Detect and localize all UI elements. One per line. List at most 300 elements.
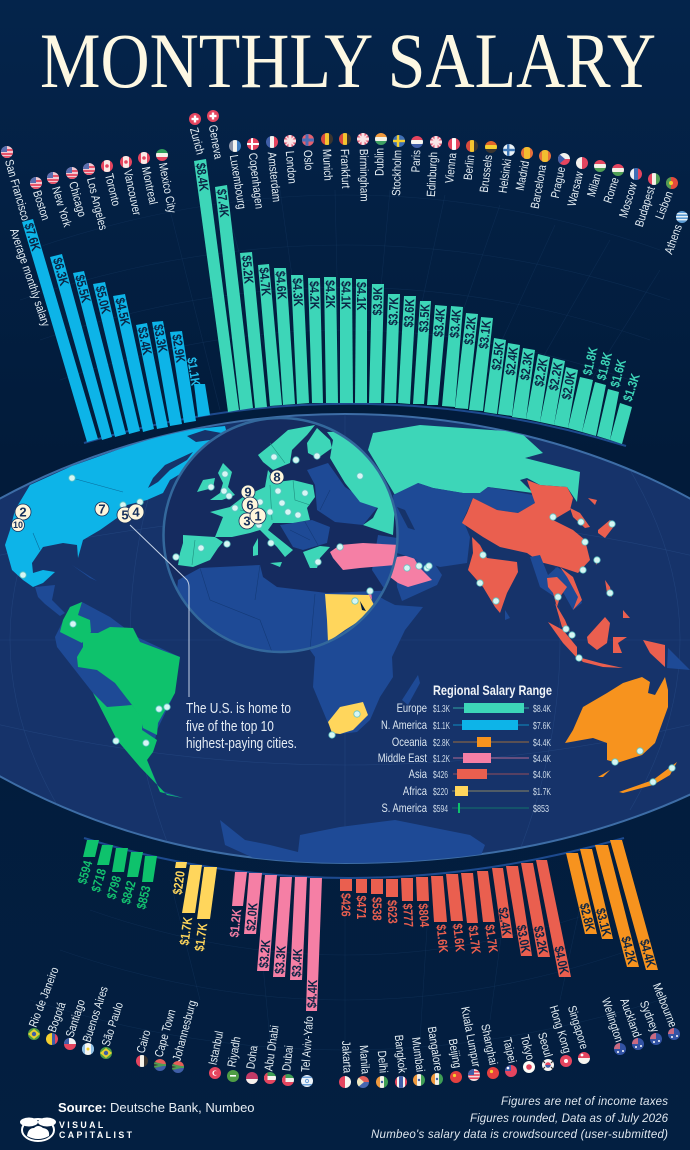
Eastern Europe (307, 463, 377, 525)
rank badges: 5 (121, 508, 129, 522)
New Zealand (619, 762, 677, 793)
legend title: Regional Salary Range (433, 682, 552, 698)
Vancouver (120, 156, 182, 426)
legend row: Middle East: $4.4K (533, 754, 551, 765)
logo: Visual Capitalist: CAPITALIST (59, 1130, 133, 1140)
San Francisco: San Francisco (2, 158, 32, 222)
Cape Town: $1.7K (176, 916, 196, 946)
rank badges: 10 (13, 520, 23, 530)
Bangkok: $623 (384, 900, 400, 924)
Hong Kong: Hong Kong (546, 1004, 573, 1055)
Geneva (206, 110, 253, 410)
Barcelona: $2.4K (502, 346, 521, 376)
Santiago (64, 848, 128, 1050)
Rio de Janeiro (27, 840, 99, 1040)
Cape Town (153, 865, 202, 1071)
Doha (245, 875, 277, 1084)
Arabia (395, 555, 442, 601)
San Francisco: $7.6K (21, 221, 44, 253)
Madrid: $2.5K (488, 341, 507, 371)
New York: New York (49, 185, 74, 229)
Bogotá: Bogotá (46, 1000, 69, 1034)
San Francisco (1, 146, 98, 442)
Manila: $471 (354, 896, 369, 920)
Chicago (66, 167, 140, 434)
Boston: $6.3K (50, 256, 72, 288)
Riyadh (226, 873, 262, 1082)
Mexico City: $1.1K (184, 356, 204, 387)
Dublin: Dublin (373, 148, 387, 176)
Brussels: $3.2K (461, 315, 479, 346)
Moscow: $1.8K (580, 345, 601, 377)
Taipei: Taipei (500, 1036, 518, 1064)
Rio de Janeiro: Rio de Janeiro (27, 965, 62, 1029)
base arc: top bars (84, 404, 626, 446)
Chicago: Chicago (66, 180, 88, 219)
legend row: Europe: $1.3K (433, 704, 450, 715)
Buenos Aires: Buenos Aires (81, 984, 111, 1044)
Prague (512, 153, 570, 419)
Johannesburg: $1.7K (191, 922, 211, 952)
Johannesburg (171, 867, 217, 1073)
Istanbul: Istanbul (207, 1030, 227, 1066)
legend row: Africa: $220 (433, 787, 448, 798)
Edinburgh (413, 136, 442, 404)
Jakarta (338, 879, 354, 1088)
legend row: S. America: $594 (433, 804, 448, 815)
Vienna (427, 138, 460, 405)
Santiago: $798 (103, 874, 124, 901)
Luxembourg (227, 140, 267, 408)
Edinburgh: $3.5K (416, 303, 433, 333)
bars: Africa (135, 862, 217, 1073)
Riyadh: Riyadh (226, 1036, 244, 1068)
Madrid: Madrid (514, 160, 532, 192)
Amsterdam: $4.6K (273, 270, 290, 300)
bars: Middle East (207, 872, 322, 1087)
Sydney (595, 845, 662, 1045)
Seoul (506, 866, 554, 1071)
Madrid (484, 147, 533, 414)
Iberia (178, 535, 223, 567)
South America (55, 602, 183, 798)
Budapest: $1.8K (594, 350, 615, 382)
Manila: Manila (356, 1045, 372, 1075)
Santiago: Santiago (64, 998, 88, 1039)
rank badges (12, 470, 284, 532)
Vienna: $3.4K (431, 307, 448, 337)
legend row: N. America: N. America (381, 719, 427, 732)
Frankfurt: $4.1K (338, 281, 354, 310)
logo: Visual Capitalist (20, 1118, 133, 1141)
Montreal (138, 152, 196, 423)
Barcelona (498, 150, 551, 416)
Munich: $4.2K (322, 280, 338, 309)
Brussels: Brussels (478, 154, 496, 193)
Brussels (455, 141, 497, 409)
Mexico City (156, 149, 210, 417)
Kuala Lumpur (446, 874, 482, 1081)
Cape Town: Cape Town (153, 1008, 179, 1059)
Montreal: $2.9K (169, 333, 188, 364)
Mumbai (400, 878, 426, 1086)
Melbourne (610, 840, 680, 1040)
legend row: Middle East: Middle East (378, 752, 427, 765)
Birmingham (354, 133, 370, 403)
Buenos Aires (81, 852, 143, 1055)
Boston (30, 177, 112, 440)
base arc: bottom bars (84, 838, 624, 878)
legend row: Middle East (378, 752, 551, 765)
Rome (554, 164, 624, 428)
Berlin: Berlin (462, 154, 478, 181)
Sydney: $4.2K (618, 935, 640, 966)
Dubai (280, 877, 307, 1086)
Melbourne: Melbourne (650, 981, 679, 1029)
Berlin (442, 140, 478, 407)
Beijing (431, 876, 463, 1083)
legend row: Africa: Africa (403, 785, 427, 798)
Barcelona: Barcelona (529, 163, 550, 210)
Luxembourg: Luxembourg (227, 154, 248, 210)
Istanbul: $1.2K (226, 908, 245, 938)
Delhi: Delhi (375, 1050, 390, 1074)
Bangalore (415, 877, 444, 1085)
Helsinki: $3.1K (476, 319, 494, 350)
Western and Central Europe (210, 470, 315, 557)
legend row: Oceania: $4.4K (533, 738, 551, 749)
bars: Asia (338, 860, 590, 1088)
Budapest (582, 173, 660, 436)
legend row: Europe: $8.4K (533, 704, 551, 715)
Melbourne: $4.4K (637, 938, 659, 969)
Istanbul (207, 872, 247, 1079)
Lisbon: Lisbon (653, 190, 676, 221)
Warsaw: Warsaw (566, 170, 586, 208)
Seoul: $3.0K (514, 924, 534, 955)
Boston: Boston (30, 189, 52, 222)
India (468, 537, 518, 613)
Dubai: $3.4K (289, 948, 305, 977)
footnotes: Figures rounded, Data as of July 2026 (470, 1113, 669, 1125)
China (462, 480, 590, 573)
Central Asia (393, 483, 535, 567)
Dubai: Dubai (280, 1045, 296, 1072)
world map (0, 414, 690, 870)
Amsterdam: Amsterdam (264, 151, 283, 203)
Vienna: Vienna (443, 152, 460, 184)
Berlin: $3.4K (447, 308, 464, 338)
Moscow (568, 168, 642, 432)
Russia (368, 425, 580, 502)
Tel Aviv-Yafo: $4.4K (304, 979, 321, 1008)
Geneva: Geneva (206, 124, 225, 161)
Beijing: $1.6K (433, 924, 451, 954)
Athens: Athens (663, 222, 685, 256)
callout leader line (130, 525, 189, 697)
footnotes: Figures are net of income taxes (501, 1096, 668, 1108)
Athens (610, 211, 688, 444)
Los Angeles: $4.5K (112, 296, 133, 328)
Cairo: $220 (170, 870, 188, 896)
Los Angeles: Los Angeles (84, 176, 109, 232)
Bogotá: $718 (88, 867, 109, 894)
Oslo: $4.2K (306, 281, 323, 310)
Copenhagen: $4.7K (256, 267, 274, 297)
Taipei: $1.7K (482, 923, 501, 954)
Milan (540, 160, 606, 425)
Dublin (369, 133, 387, 403)
Egypt (325, 594, 375, 642)
Vancouver: Vancouver (121, 169, 143, 217)
Central America (35, 565, 97, 616)
Auckland: $3.1K (593, 907, 615, 938)
Paris: Paris (410, 149, 424, 173)
Chicago: $5.0K (92, 284, 114, 316)
legend row: S. America: S. America (381, 802, 427, 815)
Zurich (187, 113, 239, 412)
Taipei (477, 871, 518, 1077)
Toronto: $3.4K (134, 325, 155, 357)
Shanghai: $1.7K (465, 925, 484, 955)
Delhi: $538 (369, 897, 385, 921)
Prague: $2.3K (517, 351, 536, 381)
Bogotá (46, 845, 113, 1045)
Tel Aviv-Yafo (299, 878, 322, 1087)
Bangalore: $804 (415, 903, 432, 928)
Mumbai: $777 (400, 903, 416, 928)
Milan: Milan (585, 172, 604, 198)
Singapore (536, 860, 590, 1064)
legend row: Asia: $426 (433, 770, 448, 781)
Warsaw (526, 157, 588, 422)
rank badges: 8 (273, 470, 281, 484)
Luxembourg: $5.2K (239, 255, 257, 285)
callout text: highest-paying cities. (186, 735, 297, 751)
legend row: Africa (403, 785, 551, 798)
Jakarta: Jakarta (339, 1040, 354, 1074)
legend row: Europe: Europe (397, 702, 427, 715)
Frankfurt: Frankfurt (337, 149, 352, 189)
legend row: Middle East: $1.2K (433, 754, 450, 765)
Frankfurt (337, 133, 354, 403)
Amsterdam (264, 136, 295, 405)
Singapore: Singapore (565, 1004, 590, 1051)
Seoul: Seoul (535, 1031, 554, 1059)
legend row: Oceania: Oceania (392, 736, 427, 749)
New York (47, 172, 126, 437)
Oslo: Oslo (300, 150, 315, 171)
Wellington: Wellington (599, 996, 625, 1044)
Budapest: Budapest (633, 185, 658, 229)
Shanghai (461, 873, 499, 1079)
Riyadh: $2.0K (243, 902, 261, 932)
Cairo (135, 862, 188, 1067)
Abu Dhabi: Abu Dhabi (263, 1025, 282, 1072)
legend row: Europe (397, 702, 551, 715)
rank badges: 6 (246, 498, 254, 512)
callout text: five of the top 10 (186, 718, 274, 734)
Birmingham: Birmingham (356, 149, 370, 202)
Toronto: Toronto (102, 172, 122, 207)
Mediterranean islands and Greece (253, 538, 330, 568)
legend row: Oceania: $2.8K (433, 738, 450, 749)
Prague: Prague (549, 166, 568, 199)
Mumbai: Mumbai (409, 1036, 426, 1073)
Paris: $3.6K (401, 298, 418, 328)
Tel Aviv-Yafo: Tel Aviv-Yafo (299, 1016, 316, 1072)
Turkey (330, 543, 400, 570)
Zurich: $8.4K (193, 162, 212, 193)
Wellington (566, 853, 626, 1055)
source: Source: Deutsche Bank, Numbeo (58, 1100, 255, 1115)
Zurich: Zurich (187, 126, 206, 156)
Geneva: $7.4K (214, 188, 232, 218)
Stockholm: $3.7K (385, 296, 402, 326)
Kuala Lumpur: Kuala Lumpur (458, 1006, 482, 1069)
Russia inset (327, 430, 400, 535)
São Paulo (100, 856, 157, 1059)
Auckland (580, 849, 644, 1050)
Tokyo (492, 868, 536, 1073)
Africa (310, 593, 423, 734)
rank badges: 3 (243, 514, 251, 528)
legend row: S. America: $853 (533, 804, 549, 815)
legend row: Asia (409, 768, 551, 781)
British Isles (197, 463, 235, 500)
Stockholm (384, 135, 405, 403)
Athens: $1.3K (620, 371, 643, 403)
Europe magnifier (164, 418, 420, 660)
Jakarta: $426 (338, 893, 354, 917)
North Africa (177, 565, 382, 651)
rank badges: 9 (244, 484, 252, 500)
Bangalore: Bangalore (425, 1026, 444, 1072)
legend row: Oceania (392, 736, 551, 749)
Edinburgh: Edinburgh (425, 152, 441, 197)
London: London (282, 150, 298, 184)
legend: Regional Salary Range (378, 682, 552, 815)
rank badges: 2 (19, 504, 27, 520)
bars: South America (27, 840, 157, 1059)
legend row: S. America (381, 802, 549, 815)
Australia (565, 677, 668, 777)
callout text: The U.S. is home to (186, 700, 291, 716)
Beijing: Beijing (445, 1038, 463, 1069)
legend row: Asia: $4.0K (533, 770, 551, 781)
Tokyo: $2.4K (495, 906, 515, 937)
Doha: $3.2K (256, 939, 274, 969)
London: $4.3K (289, 278, 306, 307)
London (282, 135, 309, 404)
Hudson Bay and Arctic channels (148, 430, 227, 488)
Cairo: Cairo (135, 1029, 154, 1055)
Milan: $2.2K (546, 361, 566, 392)
axis label: Average monthly salary: Average monthly salary (7, 227, 52, 329)
Southeast Asia (505, 555, 690, 670)
North America (5, 426, 230, 587)
Kuala Lumpur: $1.6K (450, 923, 468, 953)
São Paulo: São Paulo (100, 1001, 126, 1048)
rank badges: 7 (98, 502, 106, 516)
logo: Visual Capitalist: VISUAL (59, 1120, 106, 1130)
Hong Kong (521, 863, 573, 1067)
Rio de Janeiro: $594 (74, 859, 96, 886)
Rome: Rome (602, 176, 622, 205)
footnotes (371, 1096, 669, 1141)
Bangkok: Bangkok (391, 1034, 409, 1074)
Asia-Pacific countries (547, 498, 665, 668)
Singapore: $4.0K (551, 945, 572, 976)
Los Angeles (83, 163, 154, 432)
footnotes: Numbeo's salary data is crowdsourced (user-submitted) (371, 1129, 668, 1141)
Doha: Doha (245, 1044, 261, 1070)
Abu Dhabi: $3.3K (272, 945, 289, 975)
Johannesburg: Johannesburg (171, 999, 199, 1063)
legend row: N. America: $7.6K (533, 721, 551, 732)
legend row: N. America (381, 719, 551, 732)
Lisbon (597, 177, 678, 440)
Mexico City: Mexico City (156, 162, 178, 215)
Copenhagen (245, 138, 282, 406)
Antarctica (220, 820, 485, 863)
Munich: Munich (319, 149, 334, 181)
Stockholm: Stockholm (390, 150, 405, 196)
Helsinki (469, 144, 515, 411)
rank badges: 1 (254, 508, 262, 524)
Buenos Aires: $842 (118, 879, 139, 906)
Helsinki: Helsinki (497, 158, 514, 194)
Abu Dhabi (263, 877, 292, 1084)
Vancouver: $3.3K (150, 323, 171, 354)
Wellington: $2.8K (576, 902, 598, 933)
Munich (319, 133, 338, 403)
Manila (354, 879, 372, 1088)
Auckland: Auckland (617, 997, 643, 1039)
Montreal: Montreal (139, 166, 159, 206)
South Africa (328, 702, 368, 734)
bars: North America (1, 146, 210, 442)
Delhi (369, 879, 390, 1088)
Sydney: Sydney (637, 999, 661, 1035)
Warsaw: $2.2K (531, 357, 551, 388)
legend row: N. America: $1.1K (433, 721, 450, 732)
ocean globe (0, 414, 690, 863)
Shanghai: Shanghai (478, 1023, 499, 1066)
Dublin: $3.9K (370, 286, 386, 316)
Tokyo: Tokyo (517, 1033, 536, 1062)
Toronto (101, 160, 168, 429)
legend row: Asia: Asia (409, 768, 427, 781)
Moscow: Moscow (617, 181, 640, 219)
Paris (398, 136, 424, 404)
city markers (20, 453, 675, 785)
legend row: Africa: $1.7K (533, 787, 551, 798)
São Paulo: $853 (133, 884, 154, 911)
New York: $5.5K (72, 273, 94, 305)
bars: Oceania (566, 840, 680, 1055)
Bangkok (384, 879, 409, 1088)
bars: Europe (187, 110, 688, 444)
Birmingham: $4.1K (354, 282, 369, 311)
Hong Kong: $3.2K (531, 925, 551, 956)
Scandinavia (258, 425, 332, 470)
Rome: $2.0K (559, 370, 579, 401)
Lisbon: $1.6K (607, 357, 629, 389)
callout text (186, 700, 297, 751)
icon: logo mark (20, 1118, 56, 1141)
rank badges: 4 (132, 504, 140, 520)
